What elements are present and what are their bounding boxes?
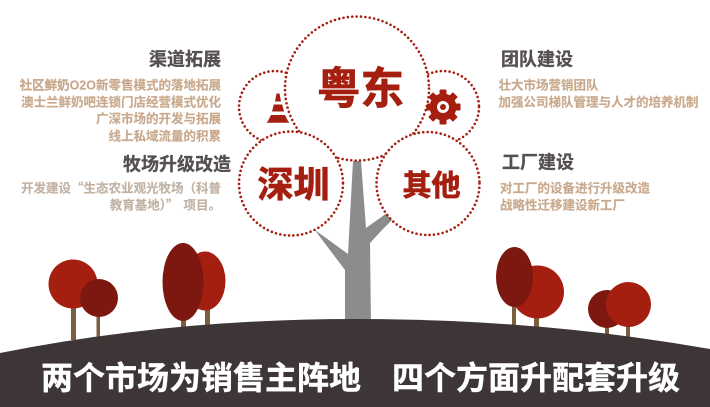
text block: 团队建设: 团队建设 <box>501 46 573 72</box>
icon: cone <box>266 94 290 123</box>
circle: 深圳 <box>239 132 343 236</box>
text block: 工厂建设 <box>500 148 651 214</box>
central tree trunk <box>315 161 392 325</box>
icon: gear <box>426 90 460 124</box>
channel expansion list: 线上私域流量的积累 <box>108 126 221 144</box>
team building list: 加强公司梯队管理与人才的培养机制 <box>498 92 699 110</box>
channel expansion list: 社区鲜奶O2O新零售模式的落地拓展 <box>19 74 221 94</box>
circle: 其他 <box>376 132 480 235</box>
text block: 工厂建设: 工厂建设 <box>502 148 574 174</box>
team building list: 壮大市场营销团队 <box>498 74 599 94</box>
tree group: centre right <box>496 247 564 328</box>
tree group: centre left <box>162 243 226 330</box>
circle: 粤东: 粤东 <box>317 54 404 117</box>
ranch upgrade description <box>21 178 221 214</box>
text block: 牧场升级改造 <box>21 150 231 214</box>
text block: 牧场升级改造: 牧场升级改造 <box>123 150 231 176</box>
circle: 粤东 <box>285 16 429 160</box>
banner headline right: 四个方面升配套升级 <box>392 353 680 399</box>
left small circle with cone icon <box>239 71 311 143</box>
circle: 其他: 其他 <box>402 162 461 204</box>
right small circle with gear icon <box>407 71 479 143</box>
ranch upgrade description: 开发建设“生态农业观光牧场（科普 <box>21 178 221 196</box>
factory building list: 对工厂的设备进行升级改造 <box>500 178 651 196</box>
text block: 团队建设 <box>498 46 699 110</box>
channel expansion list <box>19 74 221 144</box>
channel expansion list: 广深市场的开发与拓展 <box>96 108 221 127</box>
ground hill <box>0 319 710 407</box>
tree group: far left <box>48 260 118 340</box>
team building list <box>498 74 699 110</box>
banner headline left: 两个市场为销售主阵地 <box>41 353 361 399</box>
text block: 渠道拓展 <box>19 46 221 144</box>
factory building list: 战略性迁移建设新工厂 <box>500 194 625 214</box>
circle: 深圳: 深圳 <box>257 156 330 208</box>
tree group: far right <box>588 282 651 340</box>
channel expansion list: 澳士兰鲜奶吧连锁门店经营模式优化 <box>21 92 221 110</box>
text block: 渠道拓展: 渠道拓展 <box>149 46 221 72</box>
factory building list <box>500 178 651 214</box>
ranch upgrade description: 教育基地）” 项目。 <box>110 194 221 214</box>
